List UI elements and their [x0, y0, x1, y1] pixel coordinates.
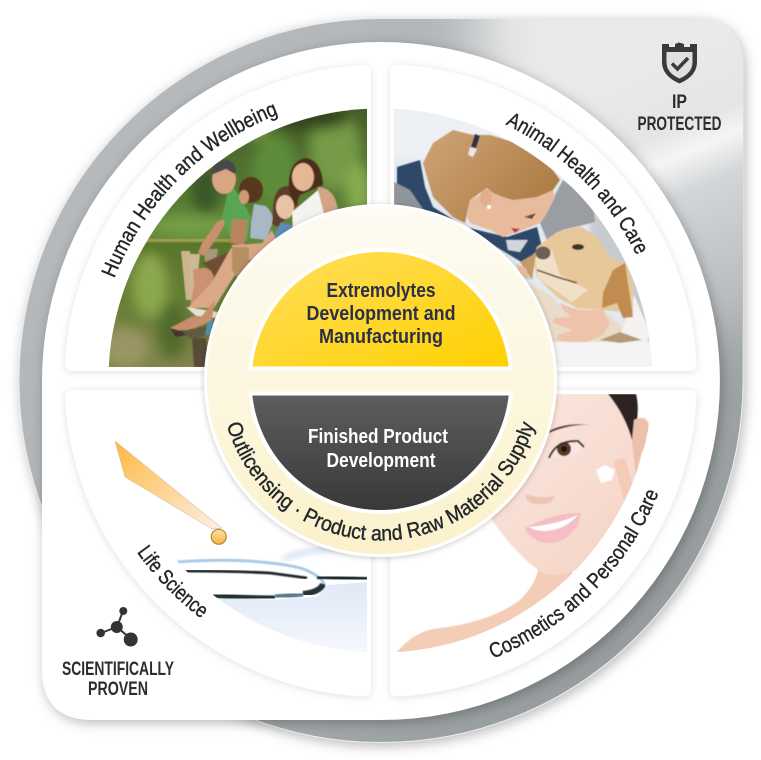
- woman: [289, 158, 323, 205]
- jetty posts: [181, 251, 193, 300]
- girl: [272, 186, 298, 228]
- hand: [553, 303, 610, 342]
- jacket: [397, 160, 542, 263]
- label: IP protected: PROTECTED: [638, 114, 722, 135]
- dark half: Finished Product: Development: [326, 450, 436, 472]
- panel: cosmetics: [388, 388, 699, 700]
- hair: [423, 130, 560, 223]
- label: Animal Health and Care: Animal Health and Care: [505, 114, 646, 254]
- dog body: [528, 283, 650, 342]
- photo: woman applying cream: [396, 394, 649, 652]
- panel: animal health: [388, 64, 699, 374]
- icon: shield with check: [662, 42, 697, 84]
- label: Cosmetics and Personal Care: Cosmetics and Personal Care: [490, 490, 658, 657]
- label: Human Health and Wellbeing: Human Health and Wellbeing: [101, 104, 278, 278]
- yellow half: Extremolytes: Extremolytes: [326, 280, 436, 302]
- photo: family on a jetty: [100, 100, 370, 373]
- girl and woman legs: [188, 248, 236, 309]
- top-right corner sheen: [450, 19, 743, 371]
- dark half: Finished Product: Finished Product: [308, 426, 448, 448]
- dog head: [533, 226, 633, 313]
- label: scientifically proven: SCIENTIFICALLY: [62, 659, 174, 680]
- label: IP protected: IP: [672, 92, 687, 113]
- central cream circle: [201, 202, 560, 561]
- photo: glass beaker: [177, 548, 370, 655]
- photo: woman with a dog: [390, 100, 660, 372]
- white base disc with rounded bottom-left corner: [42, 42, 720, 720]
- face: [467, 190, 555, 237]
- icon: pipette with droplet: [115, 441, 226, 544]
- yellow half: Extremolytes: Development and: [306, 303, 456, 325]
- icon: molecule: [96, 607, 138, 646]
- ring label: Outlicensing: Outlicensing · Product and Raw Material Supply: [228, 421, 536, 541]
- panel: human health: [63, 64, 374, 374]
- label: scientifically proven: PROVEN: [88, 679, 148, 700]
- panel: life science: [63, 388, 374, 700]
- boy: [250, 204, 273, 240]
- man: [198, 218, 226, 256]
- yellow half: Extremolytes: Manufacturing: [319, 326, 443, 348]
- yellow half: Extremolytes: [250, 250, 511, 368]
- dark half: Finished Product: [250, 394, 511, 512]
- label: Life Science: Life Science: [137, 544, 206, 618]
